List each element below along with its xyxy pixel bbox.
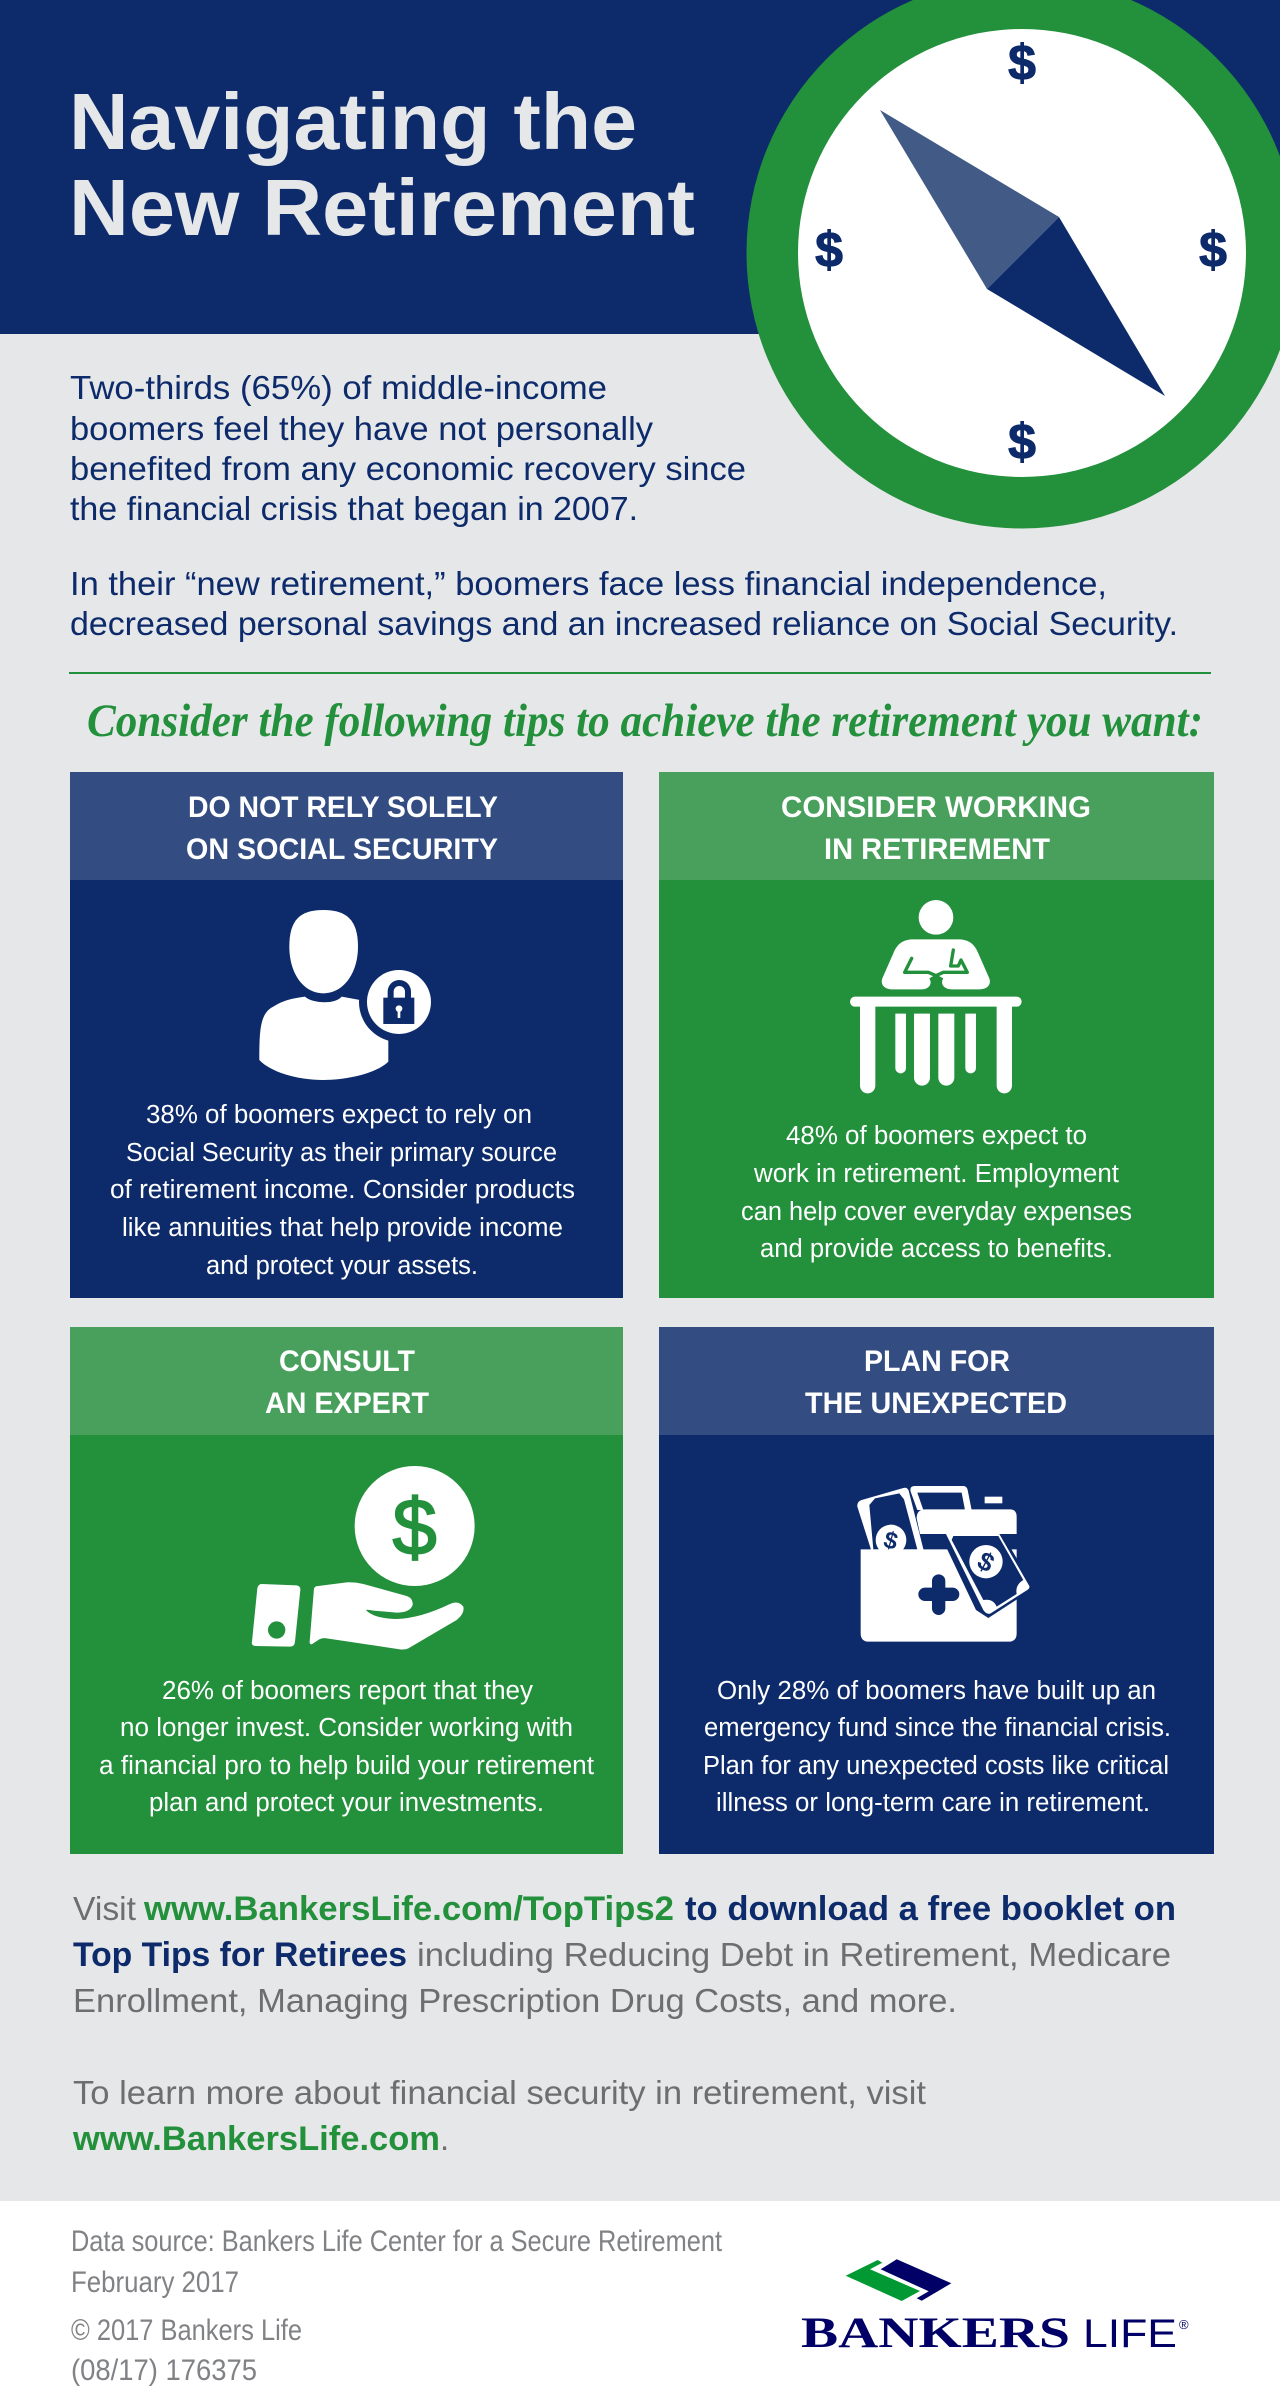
- body text: like annuities that help provide income: [122, 1214, 563, 1242]
- icon: compass: $: [1008, 35, 1036, 91]
- body text: [741, 1122, 1132, 1263]
- icon: hand with coin: [252, 1466, 475, 1650]
- body text: 38% of boomers expect to rely on: [146, 1101, 532, 1129]
- second paragraph: In their “new retirement,” boomers face less financial independence,: [70, 565, 1107, 602]
- body text: of retirement income. Consider products: [110, 1176, 575, 1204]
- intro paragraph: [70, 369, 746, 527]
- source and copyright text: [71, 2225, 723, 2387]
- heading: [781, 791, 1091, 866]
- heading: CONSIDER WORKING: [781, 791, 1091, 824]
- call to action: website: .: [440, 2120, 449, 2157]
- logo: Bankers Life: ®: [1179, 2317, 1189, 2332]
- panel: consult an expert: [70, 1327, 623, 1854]
- heading: [805, 1345, 1067, 1420]
- call to action: website: To learn more about financial security in retirement, visit: [73, 2074, 926, 2111]
- title: [69, 77, 695, 252]
- call to action: booklet: Enrollment, Managing Prescription Drug Costs, and more.: [73, 1982, 957, 2019]
- footer band: [0, 2201, 1280, 2402]
- heading: IN RETIREMENT: [824, 833, 1050, 866]
- call to action: booklet: to download a free booklet on: [685, 1890, 1176, 1928]
- icon: hand with coin: $: [392, 1482, 437, 1571]
- body text: a financial pro to help build your retirement: [99, 1752, 594, 1780]
- call to action: website: www.BankersLife.com: [72, 2120, 440, 2158]
- body text: 26% of boomers report that they: [162, 1677, 533, 1705]
- source and copyright text: February 2017: [71, 2266, 239, 2299]
- body text: and provide access to benefits.: [760, 1235, 1113, 1263]
- body text: Only 28% of boomers have built up an: [717, 1677, 1156, 1705]
- body text: can help cover everyday expenses: [741, 1198, 1132, 1226]
- call to action: website: [72, 2074, 926, 2158]
- call to action: booklet: www.BankersLife.com/TopTips2: [143, 1890, 674, 1928]
- heading: ON SOCIAL SECURITY: [186, 833, 498, 866]
- icon: medical kit with money: $: [881, 1526, 901, 1556]
- source and copyright text: © 2017 Bankers Life: [71, 2314, 302, 2347]
- panel: do not rely solely on social security: [70, 772, 623, 1298]
- intro paragraph: the financial crisis that began in 2007.: [70, 490, 638, 527]
- icon: medical kit with money: $: [973, 1545, 1000, 1579]
- body text: and protect your assets.: [206, 1252, 478, 1280]
- body text: no longer invest. Consider working with: [120, 1714, 573, 1742]
- icon: compass: $: [1008, 414, 1036, 470]
- body text: plan and protect your investments.: [149, 1789, 544, 1817]
- heading: AN EXPERT: [265, 1387, 429, 1420]
- logo: Bankers Life: BANKERS: [801, 2310, 1070, 2357]
- heading: CONSULT: [279, 1345, 415, 1378]
- second paragraph: [70, 565, 1178, 642]
- intro paragraph: Two-thirds (65%) of middle-income: [70, 369, 607, 406]
- heading: DO NOT RELY SOLELY: [188, 791, 498, 824]
- panel: consider working in retirement: [659, 772, 1214, 1298]
- title: New Retirement: [69, 163, 695, 252]
- title: Navigating the: [69, 77, 637, 166]
- source and copyright text: (08/17) 176375: [71, 2354, 257, 2387]
- heading: [186, 791, 498, 866]
- icon: person with lock: [259, 910, 439, 1080]
- heading: PLAN FOR: [864, 1345, 1010, 1378]
- icon: person at desk: [850, 900, 1022, 1093]
- header band: [0, 0, 1280, 334]
- icon: compass: [746, 0, 1280, 528]
- body text: [99, 1677, 594, 1817]
- call to action: booklet: [73, 1890, 1176, 2019]
- call to action: booklet: Visit: [73, 1890, 136, 1927]
- icon: medical kit with money: [857, 1486, 1034, 1642]
- logo: Bankers Life: [801, 2259, 1189, 2357]
- intro paragraph: boomers feel they have not personally: [70, 410, 654, 447]
- intro paragraph: benefited from any economic recovery since: [70, 450, 746, 487]
- body text: 48% of boomers expect to: [786, 1122, 1087, 1150]
- logo: Bankers Life: LIFE: [1083, 2312, 1177, 2356]
- icon: compass: $: [815, 222, 843, 278]
- heading: THE UNEXPECTED: [805, 1387, 1067, 1420]
- body text: Plan for any unexpected costs like critical: [703, 1752, 1169, 1780]
- call to action: booklet: including Reducing Debt in Retirement, Medicare: [417, 1936, 1171, 1973]
- source and copyright text: Data source: Bankers Life Center for a Secure Retirement: [71, 2225, 723, 2258]
- body text: emergency fund since the financial crisis.: [704, 1714, 1171, 1742]
- heading: [265, 1345, 429, 1420]
- call to action: booklet: Top Tips for Retirees: [73, 1936, 407, 1974]
- panel: plan for the unexpected: [659, 1327, 1214, 1854]
- body text: illness or long-term care in retirement.: [716, 1789, 1150, 1817]
- body text: Social Security as their primary source: [126, 1139, 557, 1167]
- icon: compass: $: [1199, 222, 1227, 278]
- second paragraph: decreased personal savings and an increased reliance on Social Security.: [70, 605, 1178, 642]
- body text: [110, 1101, 575, 1280]
- tips heading: Consider the following tips to achieve the retirement you want:: [87, 695, 1203, 747]
- body text: work in retirement. Employment: [753, 1160, 1119, 1188]
- body text: [703, 1677, 1171, 1817]
